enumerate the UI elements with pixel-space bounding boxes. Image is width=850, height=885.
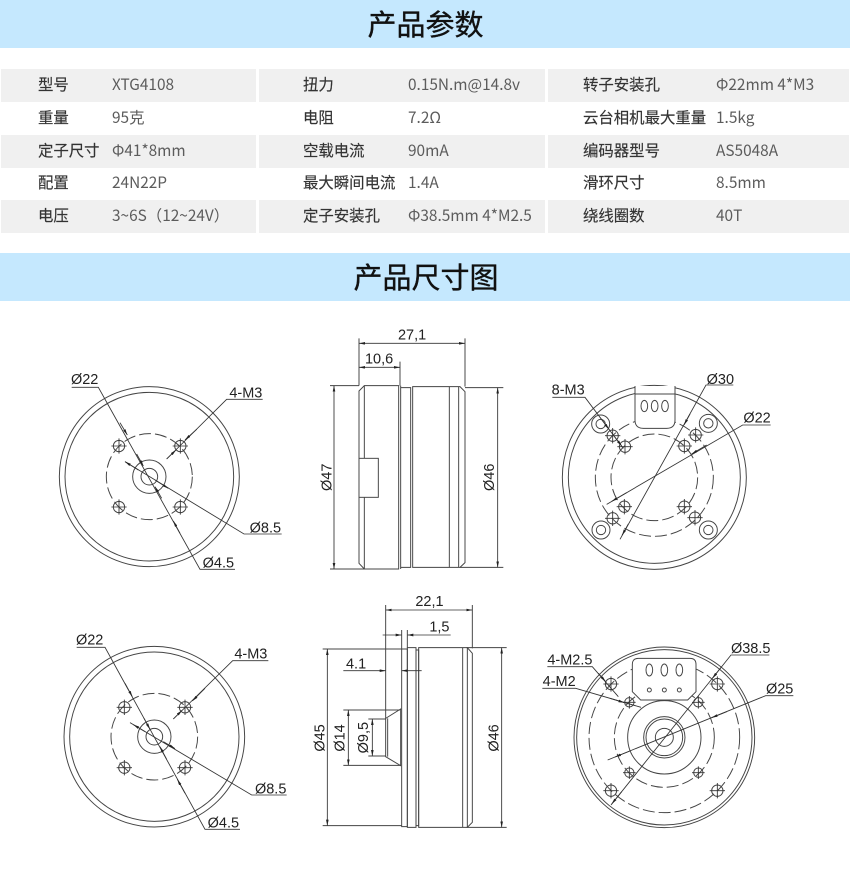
drawing: stator mounting view, top right: 8-M3	[552, 383, 585, 399]
spec row: model: XTG4108	[112, 73, 174, 95]
drawing: rotor front view, bottom left: Ø22	[76, 633, 103, 649]
spec row: model	[1, 69, 256, 102]
drawing: side view with 22,1 width, bottom centre: 1,5	[429, 619, 449, 635]
drawing: side view with 22,1 width, bottom centre: Ø46	[487, 724, 503, 752]
spec row: no-load current: 空载电流	[303, 139, 365, 161]
spec row: slip ring size: 8.5mm	[716, 171, 766, 193]
spec row: slip ring size: 滑环尺寸	[583, 171, 645, 193]
spec row: stator mounting holes	[259, 200, 545, 233]
spec row: weight	[38, 106, 144, 128]
spec row: peak current: 1.4A	[408, 171, 439, 193]
drawing: side view with 27,1 width, top centre: Ø46	[482, 464, 498, 491]
drawing: rotor front view, bottom left	[64, 633, 287, 831]
heading: product parameters: 产品参数	[367, 2, 484, 44]
spec row: stator size	[1, 135, 256, 168]
drawing: stator mounting view, top right: Ø30	[707, 372, 734, 388]
drawing: output shaft view, bottom right: 4-M2.5	[547, 652, 592, 668]
spec row: no-load current: 90mA	[408, 139, 449, 161]
drawing: side view with 22,1 width, bottom centre: Ø45	[313, 724, 329, 752]
drawing: rotor front view, bottom left: Ø4.5	[208, 815, 239, 831]
drawing: stator mounting view, top right	[552, 372, 771, 569]
spec row: resistance	[303, 106, 441, 128]
spec row: voltage: 3~6S（12~24V）	[112, 204, 229, 226]
spec row: torque: 0.15N.m@14.8v	[408, 73, 520, 95]
spec row: weight: 95克	[112, 106, 144, 128]
spec row: winding turns: 40T	[716, 204, 742, 226]
spec row: stator size: Φ41*8mm	[112, 139, 186, 161]
drawing: output shaft view, bottom right: Ø25	[766, 681, 793, 697]
spec row: max camera weight: 1.5kg	[716, 106, 754, 128]
spec row: peak current	[303, 171, 439, 193]
drawing: output shaft view, bottom right	[542, 641, 793, 828]
drawing: rotor front view, top left: Ø22	[71, 372, 98, 388]
spec row: rotor mounting holes: 转子安装孔	[583, 73, 660, 95]
drawing: rotor front view, bottom left: Ø8.5	[255, 781, 286, 797]
drawing: rotor front view, top left: Ø8.5	[250, 521, 281, 537]
drawing: rotor front view, top left	[59, 372, 282, 571]
drawing: rotor front view, top left: 4-M3	[229, 385, 262, 401]
drawing: rotor front view, top left: Ø4.5	[203, 555, 234, 571]
spec row: encoder model: AS5048A	[716, 139, 778, 161]
spec row: rotor mounting holes: Φ22mm 4*M3	[716, 73, 814, 95]
drawing: side view with 27,1 width, top centre: Ø47	[319, 464, 335, 491]
drawing: side view with 27,1 width, top centre: 10,6	[365, 351, 393, 367]
drawing: output shaft view, bottom right: 4-M2	[543, 674, 576, 690]
spec row: rotor mounting holes	[548, 69, 849, 102]
spec row: voltage: 电压	[38, 204, 69, 226]
spec row: stator mounting holes: 定子安装孔	[303, 204, 380, 226]
spec row: torque: 扭力	[303, 73, 334, 95]
spec row: winding turns	[548, 200, 849, 233]
drawing: side view with 22,1 width, bottom centre: 4.1	[346, 657, 366, 673]
drawing: output shaft view, bottom right: Ø38.5	[731, 641, 770, 657]
spec row: slip ring size	[583, 171, 766, 193]
drawing: side view with 22,1 width, bottom centre	[313, 594, 507, 827]
spec row: stator size: 定子尺寸	[38, 139, 100, 161]
heading: product dimension drawings: 产品尺寸图	[353, 255, 498, 297]
spec row: model: 型号	[38, 73, 69, 95]
spec row: winding turns: 绕线圈数	[583, 204, 645, 226]
drawing: rotor front view, bottom left: 4-M3	[234, 647, 267, 663]
spec row: torque	[259, 69, 545, 102]
drawing: side view with 27,1 width, top centre: 27,1	[398, 327, 426, 343]
spec row: weight: 重量	[38, 106, 69, 128]
spec row: stator mounting holes: Φ38.5mm 4*M2.5	[408, 204, 532, 226]
spec row: max camera weight: 云台相机最大重量	[583, 106, 706, 128]
spec row: no-load current	[259, 135, 545, 168]
spec row: encoder model	[548, 135, 849, 168]
drawing: stator mounting view, top right: Ø22	[743, 411, 771, 427]
spec row: resistance: 7.2Ω	[408, 106, 441, 128]
heading: product dimension drawings	[0, 253, 850, 301]
drawing: side view with 22,1 width, bottom centre: 22,1	[415, 594, 444, 610]
spec row: resistance: 电阻	[303, 106, 334, 128]
spec row: configuration	[38, 171, 167, 193]
drawing: side view with 22,1 width, bottom centre: Ø14	[332, 724, 348, 752]
drawing: side view with 22,1 width, bottom centre: Ø9,5	[356, 722, 372, 753]
spec row: voltage	[1, 200, 256, 233]
spec row: configuration: 24N22P	[112, 171, 167, 193]
drawing: side view with 27,1 width, top centre	[319, 327, 503, 569]
spec row: peak current: 最大瞬间电流	[303, 171, 395, 193]
heading: product parameters	[0, 0, 850, 48]
panel: specification table	[1, 69, 849, 233]
spec row: configuration: 配置	[38, 171, 69, 193]
spec row: encoder model: 编码器型号	[583, 139, 660, 161]
